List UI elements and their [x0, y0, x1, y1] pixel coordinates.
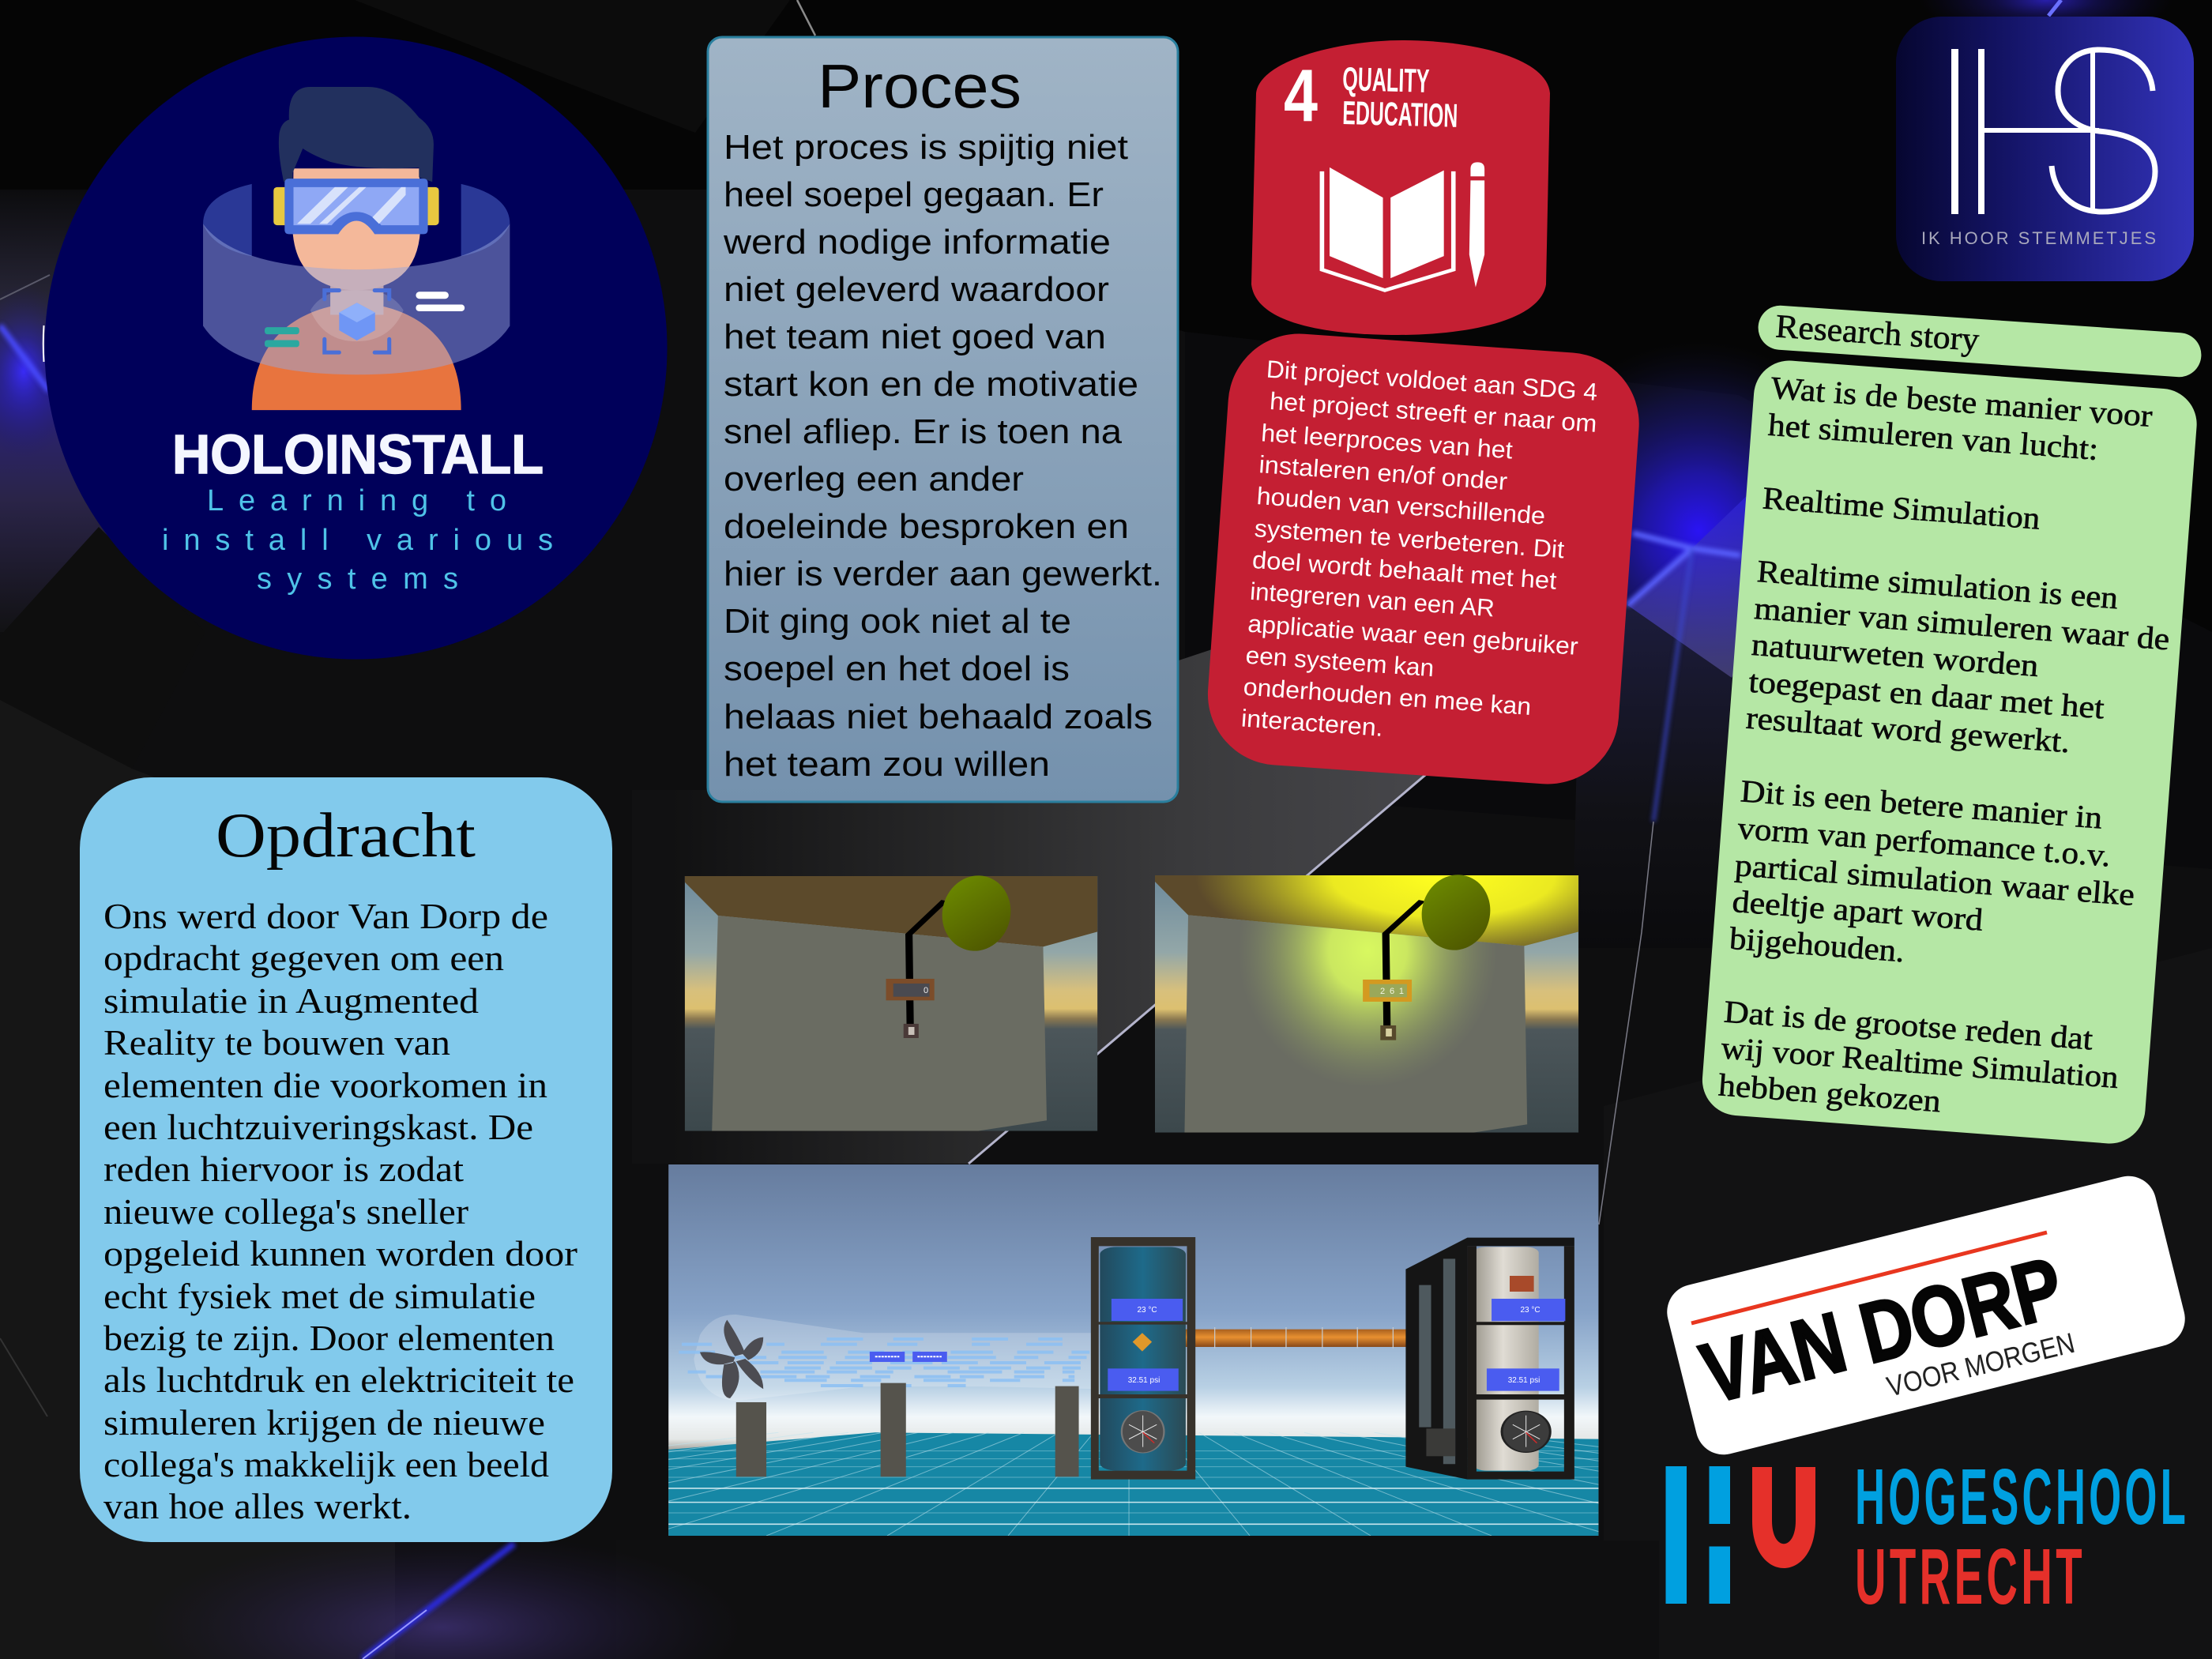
text block: Proces body: Dit ging ook niet al te — [724, 602, 1071, 641]
text block: Research story: het simuleren van lucht: — [1767, 407, 2100, 467]
text block: SDG explanation: Dit project voldoet aan SDG 4 — [1266, 356, 1598, 406]
text block: Research story: hebben gekozen — [1717, 1066, 1942, 1119]
text block: Research story: resultaat word gewerkt. — [1745, 700, 2071, 759]
text block: Opdracht body: als luchtdruk en elektriciteit te — [103, 1360, 574, 1400]
floor grid — [668, 1431, 1599, 1536]
text block: Opdracht body: elementen die voorkomen in — [103, 1065, 547, 1105]
subtitle: Learning to install various systems: install various — [162, 524, 553, 557]
text block: Proces body: het team zou willen — [724, 745, 1050, 784]
text block: SDG explanation: interacteren. — [1240, 704, 1384, 742]
logo: Van Dorp — [1661, 1170, 2191, 1461]
text block: Research story: toegepast en daar met het — [1747, 664, 2105, 725]
white tank — [1405, 1238, 1574, 1480]
panel: Proces — [708, 37, 1178, 802]
text block: Research story — [1717, 370, 2188, 1134]
text block: Opdracht body: van hoe alles werkt. — [103, 1486, 412, 1526]
screenshot: lamp on — [1155, 875, 1578, 1133]
icon: SDG 4 quality education: QUALITY — [1342, 60, 1430, 100]
air tube with particles — [679, 1315, 1099, 1401]
logo: Ik Hoor Stemmetjes: IK HOOR STEMMETJES — [1921, 228, 2156, 248]
copper pipe — [1185, 1327, 1406, 1349]
text block: Research story: wij voor Realtime Simulation — [1720, 1029, 2120, 1095]
text block: Opdracht body: collega's makkelijk een beeld — [103, 1444, 549, 1484]
text block: Proces body: Het proces is spijtig niet — [724, 128, 1128, 167]
gauge labels: 23 °C — [1520, 1306, 1540, 1315]
text block: Research story: Dit is een betere manier in — [1740, 773, 2104, 836]
panel: Research story heading — [1757, 304, 2203, 378]
text block: Proces body: hier is verder aan gewerkt. — [724, 555, 1162, 593]
text block: Research story: vorm van perfomance t.o.v. — [1736, 810, 2112, 874]
logo: Van Dorp: VAN DORP — [1692, 1239, 2071, 1421]
text block: Opdracht body — [103, 896, 577, 1526]
text block: Research story: natuurweten worden — [1751, 626, 2040, 683]
text block: Proces body: soepel en het doel is — [724, 649, 1070, 688]
panel: Research story heading: Research story — [1774, 308, 1981, 359]
logo: Van Dorp: VOOR MORGEN — [1883, 1326, 2078, 1403]
text block: Research story: Realtime Simulation — [1762, 480, 2041, 536]
text block: Proces body: helaas niet behaald zoals — [724, 698, 1153, 736]
text block: SDG explanation: houden van verschillende — [1256, 482, 1546, 530]
gauge labels — [1128, 1306, 1540, 1385]
text block: Proces body — [723, 128, 1162, 784]
text block: Opdracht body: simuleren krijgen de nieuwe — [103, 1402, 545, 1443]
heading: Opdracht: Opdracht — [216, 801, 476, 871]
text block: Opdracht body: opdracht gegeven om een — [103, 938, 504, 978]
text block: SDG explanation: systemen te verbeteren. Dit — [1254, 514, 1566, 563]
text block: Opdracht body: reden hiervoor is zodat — [103, 1149, 464, 1189]
icon: person with VR goggles — [203, 87, 510, 410]
subtitle: Learning to install various systems — [162, 484, 553, 596]
panel: Opdracht — [80, 777, 612, 1542]
text block: SDG explanation: onderhouden en mee kan — [1243, 673, 1532, 720]
text block: Opdracht body: nieuwe collega's sneller — [103, 1191, 468, 1232]
text block: Opdracht body: bezig te zijn. Door elementen — [103, 1318, 555, 1358]
text block: Proces body: doeleinde besproken en — [724, 507, 1129, 546]
text block: Proces body: niet geleverd waardoor — [724, 270, 1109, 309]
heading: Proces: Proces — [818, 51, 1021, 121]
text block: Proces body: het team niet goed van — [724, 318, 1106, 356]
screenshot: lamp off — [685, 868, 1097, 1131]
text block: Proces body: werd nodige informatie — [723, 223, 1111, 261]
text block: Research story: Realtime simulation is een — [1756, 553, 2120, 615]
text block: SDG explanation: het leerproces van het — [1260, 419, 1514, 465]
text block: Research story: deeltje apart word — [1731, 883, 1984, 938]
text block: Research story: Wat is de beste manier voor — [1770, 370, 2154, 434]
text block: Proces body: overleg een ander — [724, 460, 1024, 498]
gauge labels: 32.51 psi — [1128, 1376, 1160, 1385]
text block: SDG explanation: instaleren en/of onder — [1258, 450, 1508, 495]
text block: SDG explanation — [1240, 356, 1600, 755]
text block: Opdracht body: opgeleid kunnen worden door — [103, 1233, 577, 1273]
panel: Research story body — [1700, 358, 2199, 1146]
screenshot: lamp off: 0 — [924, 986, 928, 995]
blue tank — [1091, 1237, 1195, 1480]
logo: Hogeschool Utrecht — [1665, 1453, 2189, 1621]
text block: SDG explanation: applicatie waar een gebruiker — [1247, 610, 1579, 660]
text block: Opdracht body: simulatie in Augmented — [103, 980, 479, 1021]
text block: Research story: partical simulation waar elke — [1734, 847, 2136, 912]
logo: Ik Hoor Stemmetjes — [1896, 17, 2194, 281]
fan — [700, 1320, 763, 1398]
panel: SDG explanation — [1203, 329, 1644, 788]
text block: Proces body: heel soepel gegaan. Er — [724, 175, 1104, 214]
logo circle: HoloInstall — [44, 36, 667, 659]
gauge labels: 32.51 psi — [1508, 1376, 1540, 1385]
text block: Opdracht body: Reality te bouwen van — [103, 1022, 450, 1063]
text block: SDG explanation: een systeem kan — [1245, 641, 1435, 682]
text block: SDG explanation: het project streeft er naar om — [1269, 387, 1598, 438]
screenshot: AR simulation scene — [668, 1164, 1599, 1536]
text block: Opdracht body: Ons werd door Van Dorp de — [103, 896, 548, 936]
text block: Research story: bijgehouden. — [1729, 920, 1905, 969]
subtitle: Learning to install various systems: systems — [257, 562, 458, 596]
text block: Research story: manier van simuleren waar de — [1753, 590, 2171, 656]
icon: SDG 4 quality education — [1251, 40, 1550, 335]
icon: SDG 4 quality education: EDUCATION — [1342, 94, 1458, 134]
text block: SDG explanation: doel wordt behaalt met het — [1251, 546, 1558, 595]
pillars — [736, 1383, 1079, 1477]
icon: SDG 4 quality education: 4 — [1284, 54, 1318, 137]
gauge labels: 23 °C — [1137, 1306, 1157, 1315]
text block: Research story: Dat is de grootse reden dat — [1723, 994, 2094, 1057]
subtitle: Learning to install various systems: Learning to — [207, 484, 506, 517]
text block: Opdracht body: echt fysiek met de simulatie — [103, 1276, 536, 1316]
text block: SDG explanation: integreren van een AR — [1249, 577, 1495, 622]
title: HOLOINSTALL: HOLOINSTALL — [172, 423, 544, 485]
screenshot: lamp on: 2 6 1 — [1380, 987, 1404, 996]
text block: Opdracht body: een luchtzuiveringskast. De — [103, 1107, 533, 1147]
text block: Proces body: start kon en de motivatie — [724, 365, 1138, 404]
text block: Proces body: snel afliep. Er is toen na — [724, 412, 1123, 451]
